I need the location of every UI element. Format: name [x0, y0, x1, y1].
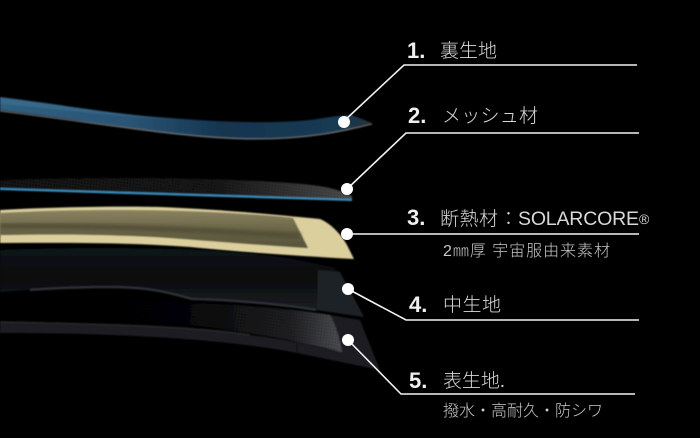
label 2	[408, 103, 538, 128]
label 5: 表生地.	[443, 370, 505, 392]
label 2: メッシュ材	[442, 105, 538, 127]
label 3: ®	[639, 211, 650, 227]
leader 3	[341, 228, 639, 240]
leader 2	[341, 133, 639, 195]
label 4: 4.	[409, 292, 427, 317]
label 5	[409, 368, 505, 393]
label 4: 中生地	[443, 294, 501, 316]
leader 4	[342, 283, 639, 320]
label 1	[407, 38, 497, 63]
label 3: 断熱材	[440, 208, 498, 230]
label 2: 2.	[408, 103, 426, 128]
leader 1	[338, 65, 637, 128]
label 3: ：	[499, 209, 518, 230]
label 3	[407, 205, 650, 230]
layer 4: middle fabric	[0, 248, 364, 317]
label 5: 5.	[409, 368, 427, 393]
sublabel 5: 撥水・高耐久・防シワ	[443, 402, 603, 420]
layer 5: outer fabric	[0, 293, 380, 370]
layer 1: lining fabric	[0, 97, 372, 139]
label 3: 3.	[407, 205, 425, 230]
leader 5	[342, 334, 635, 394]
layer 3: insulation SOLARCORE	[0, 207, 354, 259]
sublabel 3: 2㎜厚 宇宙服由来素材	[443, 242, 610, 260]
label 1: 1.	[407, 38, 425, 63]
label 4	[409, 292, 501, 317]
label 1: 裏生地	[440, 40, 497, 62]
layer 2: mesh	[0, 178, 352, 200]
label 3: SOLARCORE	[518, 208, 639, 230]
